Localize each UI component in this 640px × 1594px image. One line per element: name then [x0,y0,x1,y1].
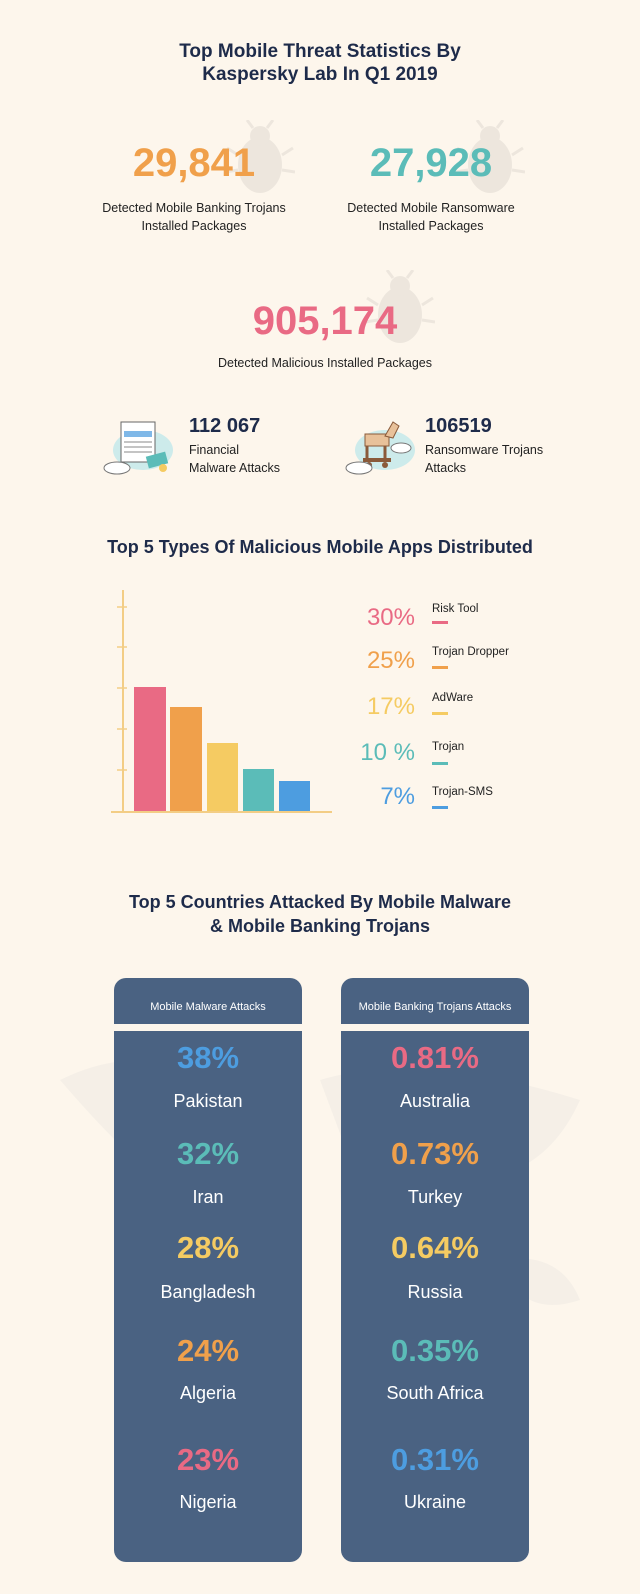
bar chart [111,590,332,813]
text: 30% [367,604,415,631]
title [179,41,461,85]
text: Trojan Dropper [432,646,509,658]
stat: ransomware: 27,928 [370,141,492,185]
stat: ransomware trojans: Attacks [425,461,466,475]
stat: financial malware: 112 067 [189,415,260,437]
text: 7% [380,783,415,810]
title: Top Mobile Threat Statistics By [179,41,461,62]
panel: mobile banking trojans attacks [341,978,529,1562]
stat: banking trojans: 29,841 [133,141,255,185]
panel: mobile banking trojans attacks: Ukraine [404,1492,466,1512]
panel: mobile banking trojans attacks: 0.35% [391,1333,479,1368]
stat: financial malware [189,415,280,475]
heading: top 5 countries: & Mobile Banking Trojans [210,916,430,936]
stat: banking trojans [102,141,286,233]
panel header [341,978,529,1024]
panel header: Mobile Malware Attacks [150,1001,266,1013]
icon: bug watermark 1 [227,120,295,193]
stat: ransomware trojans: 106519 [425,415,492,437]
panel: mobile malware attacks: Bangladesh [160,1282,256,1302]
panel: mobile malware attacks: Nigeria [179,1492,237,1512]
panel: mobile banking trojans attacks: South Africa [386,1383,484,1403]
stat: ransomware trojans: Ransomware Trojans [425,443,543,457]
panel header: Mobile Banking Trojans Attacks [359,1001,511,1013]
title: Kaspersky Lab In Q1 2019 [202,64,438,85]
stat: banking trojans: Installed Packages [142,219,246,233]
heading: top 5 types: Top 5 Types Of Malicious Mobile Apps Distributed [107,537,533,557]
text: Trojan [432,741,464,753]
text: 17% [367,693,415,720]
panel: mobile malware attacks [114,978,302,1562]
text: Risk Tool [432,603,478,615]
world map watermark [20,1040,620,1360]
stat: ransomware [347,141,515,233]
text: AdWare [432,692,473,704]
panel: mobile malware attacks: Algeria [180,1383,236,1403]
icon: trojan horse [346,421,415,474]
icon: financial browser [104,422,173,474]
panel: mobile banking trojans attacks: 0.73% [391,1136,479,1171]
legend [360,603,509,810]
stat: financial malware: Financial [189,443,239,457]
panel: mobile malware attacks: Iran [192,1187,224,1207]
stat: malicious: Detected Malicious Installed Packages [218,356,432,370]
text: 10 % [360,739,415,766]
panel: mobile banking trojans attacks: Russia [407,1282,463,1302]
text: Trojan-SMS [432,786,493,798]
stat: ransomware trojans [425,415,543,475]
icon: bug watermark 3 [366,270,435,343]
panel header [114,978,302,1024]
panel: mobile banking trojans attacks: 0.31% [391,1442,479,1477]
stat: malicious [218,299,432,370]
panel: mobile malware attacks: 23% [177,1442,239,1477]
panel: mobile malware attacks: 32% [177,1136,239,1171]
stat: malicious: 905,174 [253,299,397,343]
heading: top 5 countries [129,892,511,936]
icon: bug watermark 2 [456,120,525,193]
stat: financial malware: Malware Attacks [189,461,280,475]
panel: mobile banking trojans attacks: 0.81% [391,1040,479,1075]
panel: mobile banking trojans attacks: 0.64% [391,1230,479,1265]
panel: mobile malware attacks: 24% [177,1333,239,1368]
stat: ransomware: Installed Packages [379,219,483,233]
stat: banking trojans: Detected Mobile Banking Trojans [102,201,286,215]
heading: top 5 countries: Top 5 Countries Attacked By Mobile Malware [129,892,511,912]
stat: ransomware: Detected Mobile Ransomware [347,201,515,215]
panel: mobile malware attacks: 38% [177,1040,239,1075]
panel: mobile malware attacks: Pakistan [173,1091,243,1111]
panel: mobile banking trojans attacks: Turkey [408,1187,462,1207]
panel: mobile banking trojans attacks: Australia [400,1091,470,1111]
panel: mobile malware attacks: 28% [177,1230,239,1265]
text: 25% [367,647,415,674]
